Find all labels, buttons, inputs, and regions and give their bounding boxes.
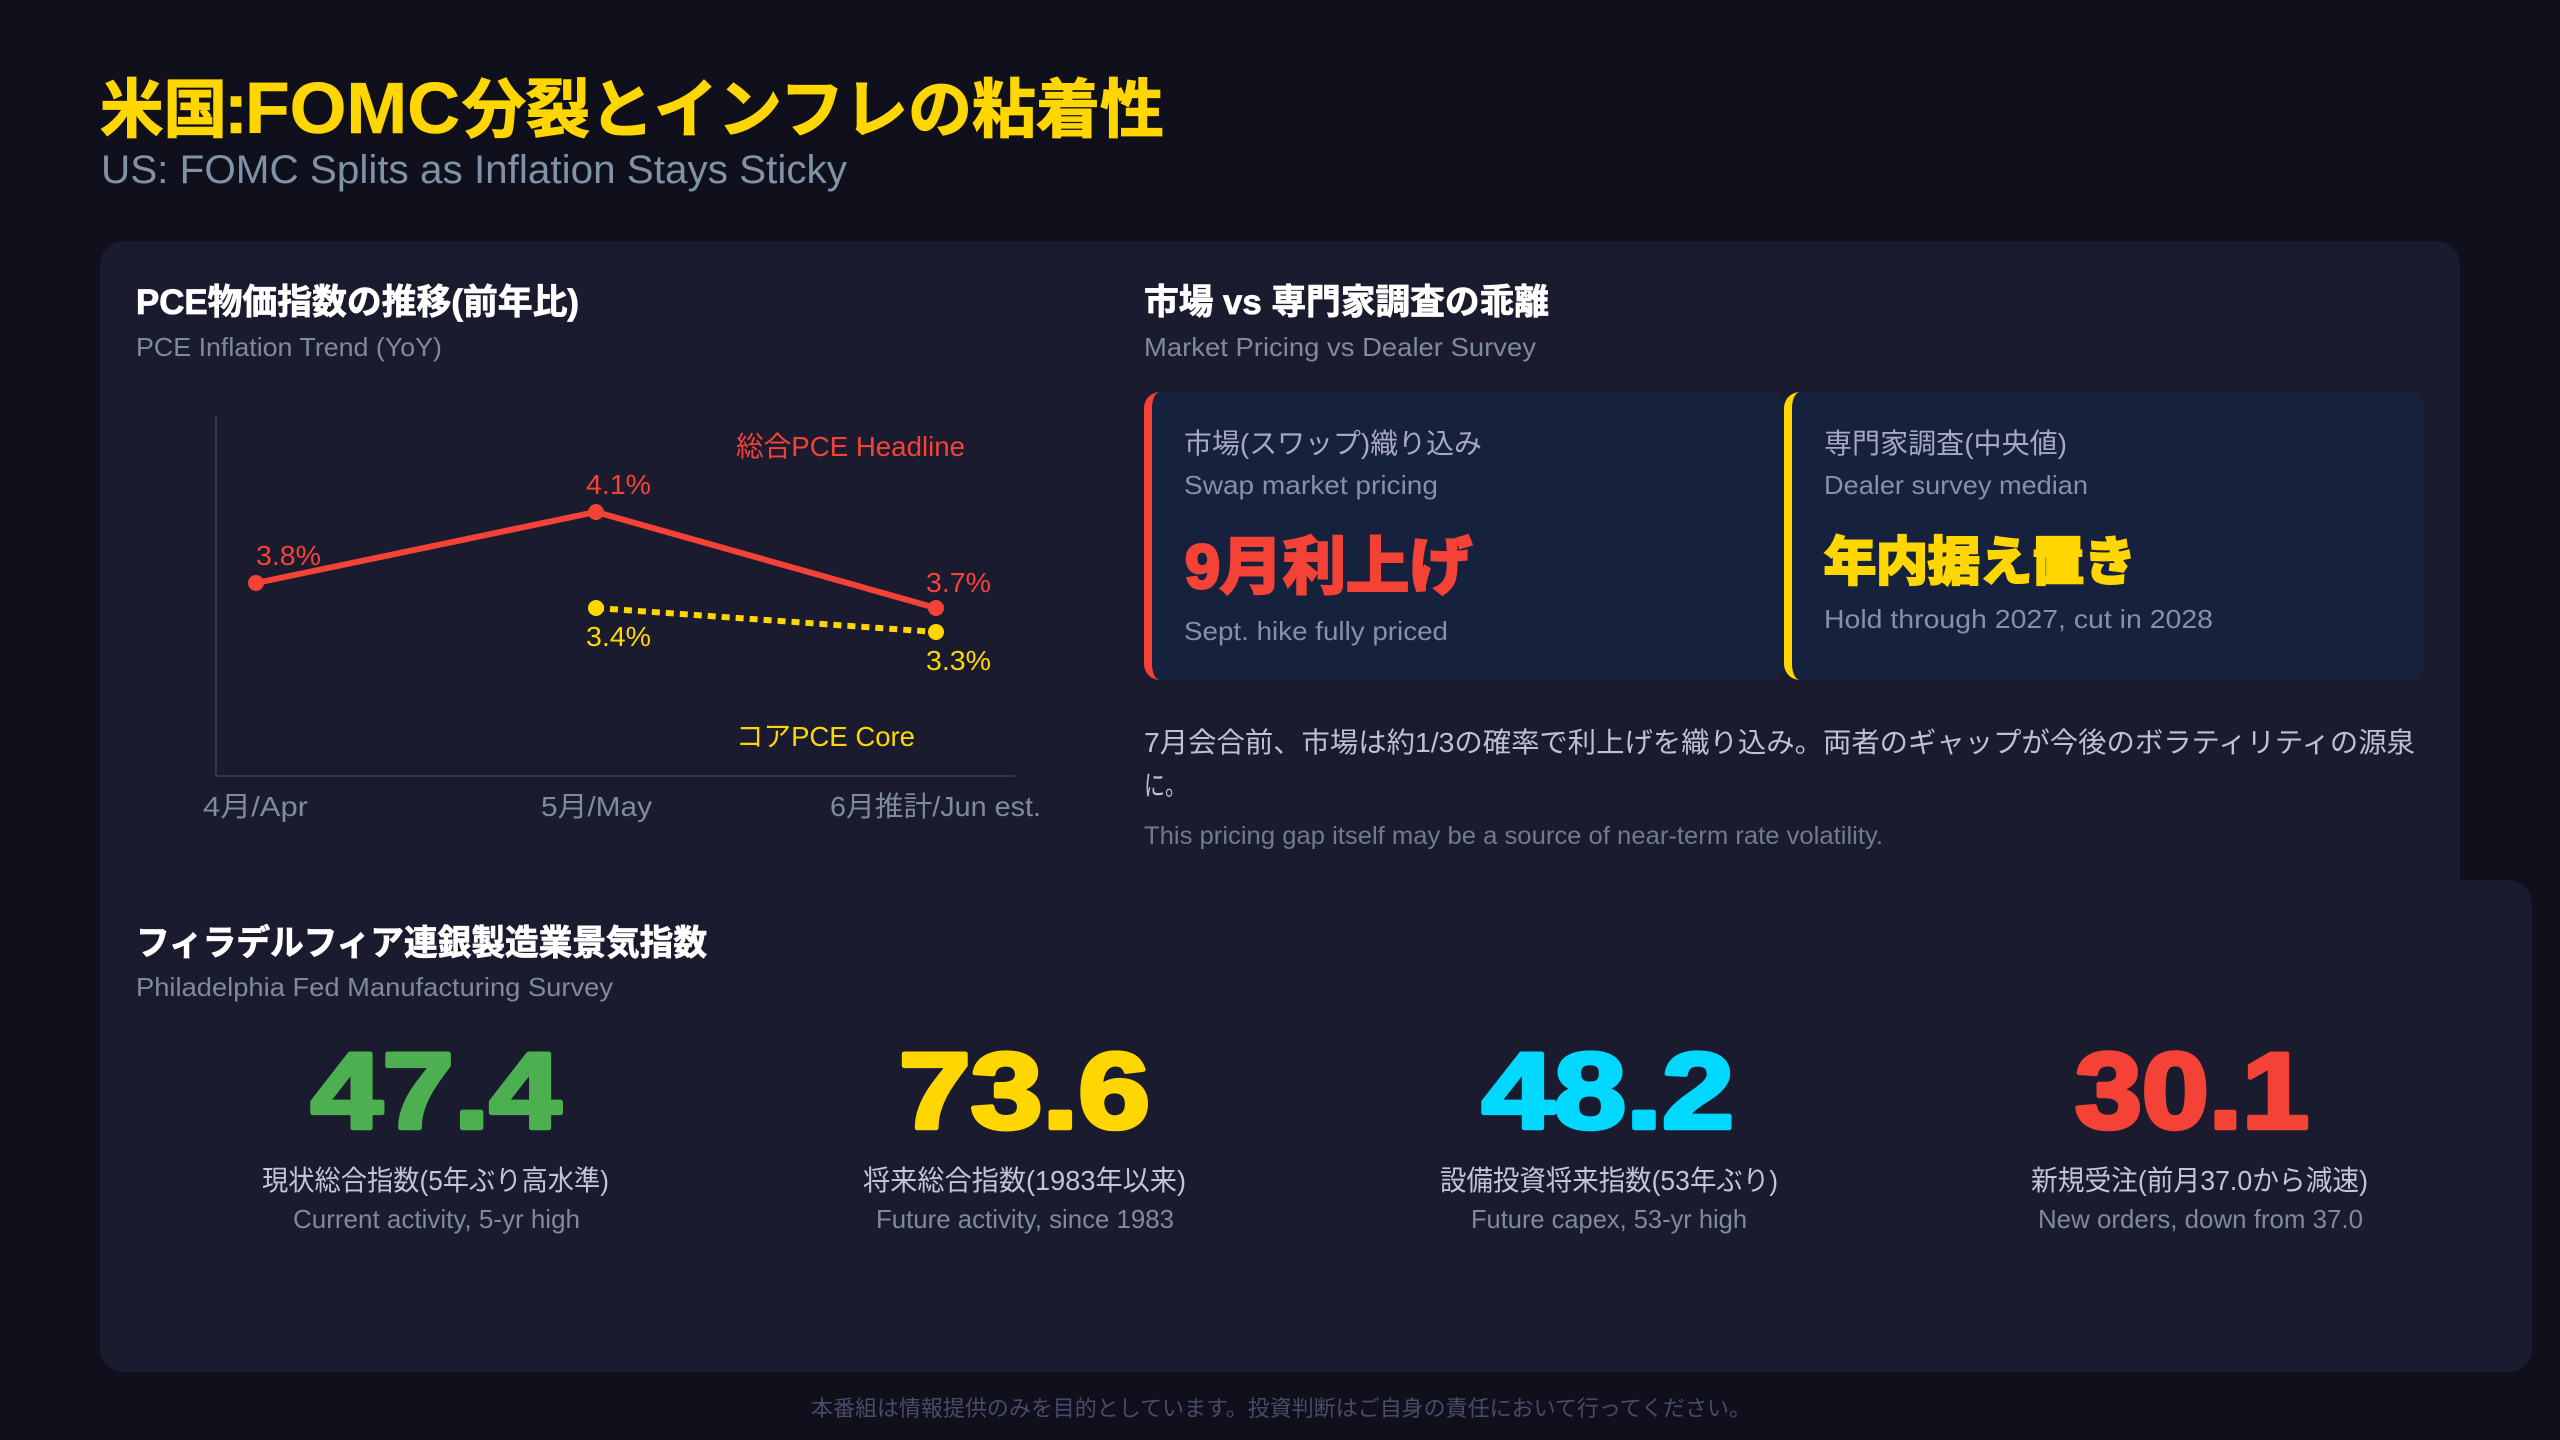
panel: lower background: [100, 880, 2532, 1372]
line series: headline PCE: 4.1%: [586, 469, 651, 500]
legend label: headline: 総合PCE Headline: [736, 431, 965, 462]
title: [100, 69, 1164, 149]
footer disclaimer: 本番組は情報提供のみを目的としています。投資判断はご自身の責任において行ってください。: [811, 1396, 1751, 1421]
subtitle: US: FOMC Splits as Inflation Stays Sticky: [101, 148, 847, 192]
card: swap market pricing: 市場(スワップ)織り込み: [1184, 428, 1482, 459]
card: dealer survey median: Hold through 2027, cut in 2028: [1824, 604, 2213, 634]
title: :: [224, 69, 248, 149]
metric: new orders: New orders, down from 37.0: [2038, 1204, 2363, 1234]
header: [100, 69, 1164, 192]
metric: current activity: Current activity, 5-yr high: [293, 1204, 580, 1234]
panel: Philadelphia Fed survey: [136, 923, 2368, 1234]
section heading: フィラデルフィア連銀製造業景気指数: [136, 923, 707, 963]
card: dealer survey median: 年内据え置き: [1824, 534, 2136, 592]
commentary: に。: [1144, 770, 1186, 801]
metric: future capex: 設備投資将来指数(53年ぶり): [1440, 1165, 1778, 1196]
card: dealer survey median: 専門家調査(中央値): [1824, 428, 2067, 459]
chart axes: [216, 416, 1015, 776]
x axis labels: 4月/Apr: [203, 791, 308, 822]
x axis labels: 5月/May: [541, 791, 652, 822]
line series: headline PCE: 3.7%: [926, 567, 991, 598]
metric: new orders: 30.1: [2075, 1030, 2309, 1151]
line series: headline PCE: 3.8%: [256, 540, 321, 571]
metric: future capex: Future capex, 53-yr high: [1471, 1204, 1747, 1234]
chart subheading: PCE Inflation Trend (YoY): [136, 332, 442, 362]
metric: current activity: [262, 1030, 609, 1234]
metric: current activity: 現状総合指数(5年ぶり高水準): [262, 1165, 609, 1196]
card: swap market pricing: 9月利上げ: [1185, 533, 1472, 602]
title: 分裂とインフレの粘着性: [462, 74, 1164, 146]
metric: future activity: 73.6: [899, 1030, 1150, 1151]
metric: future capex: [1440, 1030, 1778, 1234]
x axis labels: [203, 791, 1041, 822]
section subheading: Market Pricing vs Dealer Survey: [1144, 332, 1536, 362]
card: dealer survey median: [1784, 392, 2424, 680]
metric: future activity: 将来総合指数(1983年以来): [863, 1165, 1186, 1196]
card: swap market pricing: Swap market pricing: [1184, 470, 1438, 500]
title: FOMC: [245, 69, 460, 149]
panel: market vs dealer survey: [1144, 283, 2424, 850]
line series: core PCE: 3.3%: [926, 645, 991, 676]
metric: current activity: 47.4: [311, 1030, 561, 1151]
metric: future activity: Future activity, since 1983: [876, 1204, 1174, 1234]
x axis labels: 6月推計/Jun est.: [830, 791, 1041, 822]
line series: core PCE: 3.4%: [586, 621, 651, 652]
metric: future capex: 48.2: [1482, 1030, 1734, 1151]
card: swap market pricing: [1144, 392, 1784, 680]
section heading: 市場 vs 専門家調査の乖離: [1144, 283, 1549, 322]
section subheading: Philadelphia Fed Manufacturing Survey: [136, 972, 613, 1002]
panel: PCE inflation chart: [136, 283, 1041, 822]
metric: new orders: [2031, 1030, 2368, 1234]
card: swap market pricing: Sept. hike fully priced: [1184, 616, 1448, 646]
metric: future activity: [863, 1030, 1186, 1234]
commentary: [1144, 727, 2415, 850]
commentary: 7月会合前、市場は約1/3の確率で利上げを織り込み。両者のギャップが今後のボラティリティの源泉: [1144, 727, 2415, 758]
legend label: core: コアPCE Core: [736, 721, 915, 752]
commentary: This pricing gap itself may be a source of near-term rate volatility.: [1144, 822, 1883, 850]
card: dealer survey median: Dealer survey median: [1824, 470, 2088, 500]
metric: new orders: 新規受注(前月37.0から減速): [2031, 1165, 2368, 1196]
panel: upper background: [100, 241, 2460, 1041]
line series: core PCE: [586, 600, 991, 676]
title: 米国: [100, 74, 227, 146]
line series: headline PCE: [248, 469, 991, 616]
chart heading: PCE物価指数の推移(前年比): [136, 283, 579, 322]
